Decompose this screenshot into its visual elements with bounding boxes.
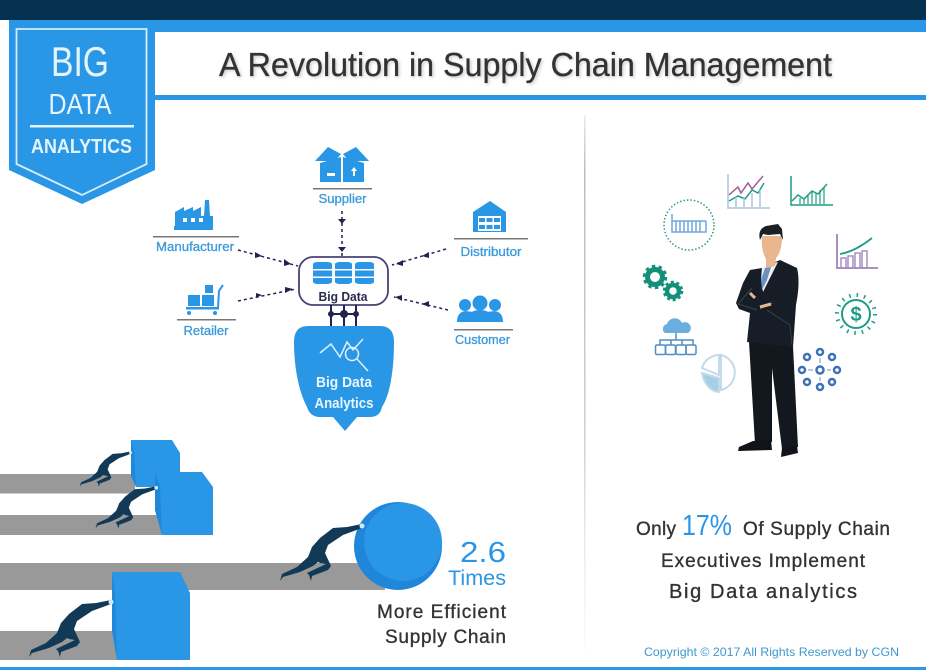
label: manufacturer	[153, 236, 239, 254]
stat: 2.6 times	[448, 537, 506, 590]
text: more efficient supply chain	[377, 602, 507, 648]
text: only 17 percent: Of Supply Chain	[743, 519, 890, 540]
stat: 2.6 times: 2.6	[460, 537, 506, 569]
icon: line chart 2	[791, 176, 833, 205]
icon: line chart 1	[728, 174, 770, 208]
badge: big data analytics: DATA	[48, 89, 112, 121]
text: more efficient supply chain: Supply Chain	[385, 627, 506, 648]
label: distributor	[454, 238, 528, 259]
title: A Revolution in Supply Chain Management	[219, 46, 832, 83]
copyright: Copyright © 2017 All Rights Reserved by CGN	[644, 645, 899, 659]
text: only 17 percent: Big Data analytics	[669, 581, 857, 603]
big data analytics shield: Analytics	[314, 395, 374, 412]
ball	[354, 502, 442, 590]
text: only 17 percent: Executives Implement	[661, 551, 866, 572]
icon: network dots	[799, 349, 840, 390]
figure pushing block 1	[80, 451, 132, 487]
icon: distributor warehouse	[473, 201, 506, 232]
arm highlight	[738, 288, 773, 310]
icon: dollar	[837, 295, 875, 333]
icon: supplier box	[315, 147, 369, 182]
badge: big data analytics: BIG	[51, 38, 109, 85]
tie	[761, 267, 771, 290]
icon: dollar: $	[850, 304, 862, 326]
big data analytics shield	[294, 326, 394, 431]
stat: 2.6 times: Times	[448, 567, 506, 590]
text: more efficient supply chain: More Efficient	[377, 602, 507, 623]
title: A Revolution in Supply Chain Management	[220, 48, 834, 84]
block 1	[131, 440, 180, 487]
roads	[0, 474, 385, 660]
label: supplier	[313, 188, 372, 206]
block 3	[112, 572, 190, 660]
icon: bar line chart	[837, 234, 878, 268]
shoes	[738, 440, 772, 451]
bottom rule	[0, 667, 926, 670]
icon: gears	[644, 266, 682, 300]
legs	[749, 342, 798, 449]
icon: cloud hierarchy	[656, 318, 696, 354]
label: retailer	[177, 319, 236, 338]
icon: dotted circle chart	[664, 200, 714, 250]
big data node	[299, 257, 388, 305]
figure pushing block 3	[29, 600, 114, 657]
hair	[759, 224, 783, 240]
label: manufacturer: Manufacturer	[156, 240, 234, 254]
hands	[750, 293, 771, 307]
figure pushing ball	[280, 524, 364, 581]
text: only 17 percent: Only	[636, 519, 676, 540]
label: customer: Customer	[455, 333, 510, 347]
header band	[9, 20, 926, 100]
big data analytics shield: Big Data	[316, 374, 373, 391]
label: supplier: Supplier	[318, 192, 366, 206]
icon: analytics chart	[320, 339, 368, 371]
big data node: Big Data	[318, 289, 368, 304]
badge: big data analytics: ANALYTICS	[31, 136, 132, 158]
connectors	[329, 305, 358, 326]
icon: pie chart	[702, 355, 735, 392]
label: distributor: Distributor	[460, 244, 522, 259]
neck and face	[762, 236, 782, 268]
shirt	[761, 262, 778, 292]
text: only 17 percent	[636, 510, 890, 603]
divider	[584, 115, 586, 650]
label: retailer: Retailer	[184, 324, 228, 338]
businessman	[736, 224, 799, 457]
figure pushing block 2	[96, 486, 158, 528]
block 2	[155, 472, 213, 535]
icon: retailer cart	[186, 285, 223, 315]
top dark bar	[0, 0, 926, 20]
badge: big data analytics	[9, 20, 155, 204]
jacket	[736, 260, 799, 347]
icon: manufacturer factory	[174, 200, 213, 230]
text: only 17 percent: 17%	[682, 510, 732, 542]
arrows into big data	[238, 211, 448, 310]
icon: customer group	[457, 296, 503, 322]
